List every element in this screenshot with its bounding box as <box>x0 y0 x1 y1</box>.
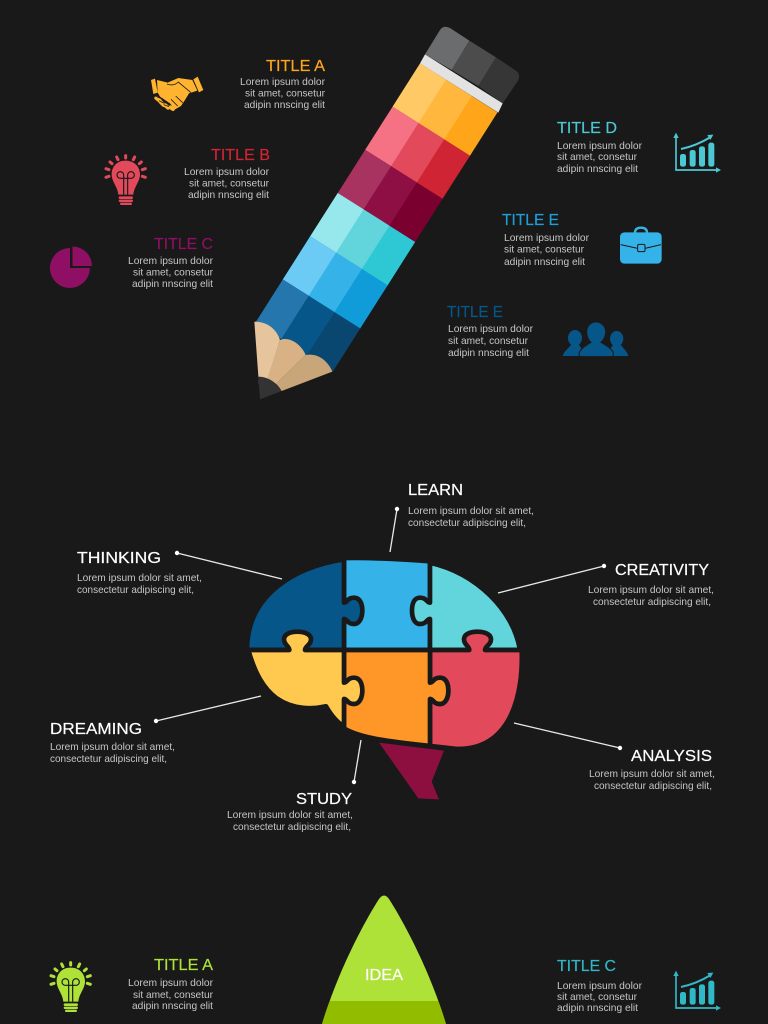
block: title C bottom: TITLE C <box>557 958 616 975</box>
block: title E navy: adipin nnscing elit <box>448 348 529 359</box>
block: title E navy <box>447 304 534 359</box>
block: title E blue: adipin nnscing elit <box>504 257 585 268</box>
block: title D: Lorem ipsum dolor <box>557 141 643 152</box>
label: learn: consectetur adipiscing elit, <box>408 518 526 529</box>
label: learn <box>408 482 534 529</box>
block: title E navy: Lorem ipsum dolor <box>448 324 534 335</box>
block: title D <box>557 120 643 175</box>
puzzle piece: pink <box>430 632 522 749</box>
block: title C: sit amet, consetur <box>133 268 214 278</box>
block: title A top: TITLE A <box>266 58 325 75</box>
puzzle piece: yellow <box>248 632 362 727</box>
block: title A bottom: adipin nnscing elit <box>132 1001 213 1012</box>
block: title E blue: TITLE E <box>502 212 559 229</box>
label: analysis <box>589 748 715 792</box>
label: analysis: consectetur adipiscing elit, <box>594 781 712 792</box>
puzzle piece: orange <box>344 650 448 746</box>
connector: study <box>352 740 361 784</box>
connector: dreaming <box>154 696 261 723</box>
brain puzzle <box>247 558 522 799</box>
label: dreaming: Lorem ipsum dolor sit amet, <box>50 742 175 753</box>
block: title D: sit amet, consetur <box>557 152 638 163</box>
icon: growth chart bottom <box>673 971 721 1011</box>
block: title E navy: TITLE E <box>447 304 503 321</box>
block: title C: Lorem ipsum dolor <box>128 256 214 267</box>
block: title B <box>184 147 270 201</box>
label: creativity: CREATIVITY <box>615 562 709 579</box>
connector: analysis <box>514 723 622 750</box>
icon: light bulb red <box>106 156 145 205</box>
block: title C bottom: adipin nnscing elit <box>557 1003 638 1014</box>
label: study: STUDY <box>296 791 352 808</box>
idea cone <box>322 896 446 1024</box>
label: learn: LEARN <box>408 482 463 499</box>
label: dreaming <box>50 721 175 765</box>
label: thinking: Lorem ipsum dolor sit amet, <box>77 573 202 584</box>
pencil wood tip <box>254 322 332 399</box>
icon: people <box>563 322 628 357</box>
label: learn: Lorem ipsum dolor sit amet, <box>408 506 534 517</box>
block: title D: adipin nnscing elit <box>557 164 638 175</box>
block: title C: adipin nnscing elit <box>132 279 213 290</box>
label: thinking: THINKING <box>77 550 161 567</box>
label: thinking <box>77 550 202 596</box>
block: title A top: adipin nnscing elit <box>244 100 325 111</box>
puzzle piece: cyan <box>412 563 520 650</box>
block: title A top: sit amet, consetur <box>245 88 326 100</box>
puzzle piece: navy <box>247 559 362 650</box>
label: creativity: consectetur adipiscing elit, <box>593 597 711 608</box>
block: title C bottom: sit amet, consetur <box>557 992 638 1003</box>
block: title E blue: Lorem ipsum dolor <box>504 233 590 244</box>
label: thinking: consectetur adipiscing elit, <box>77 585 194 596</box>
block: title C <box>128 236 214 290</box>
pencil eraser <box>420 27 519 113</box>
connector: thinking <box>175 551 282 579</box>
label: study <box>227 791 353 833</box>
block: title E navy: sit amet, consetur <box>448 336 529 347</box>
block: title B: adipin nnscing elit <box>188 190 269 201</box>
icon: briefcase <box>620 228 662 264</box>
block: title A bottom: Lorem ipsum dolor <box>128 978 214 989</box>
block: title E blue: sit amet, consetur <box>504 244 585 256</box>
connector: creativity <box>498 564 606 593</box>
label: analysis: Lorem ipsum dolor sit amet, <box>589 769 715 780</box>
label: creativity <box>588 562 714 608</box>
label: dreaming: consectetur adipiscing elit, <box>50 754 167 765</box>
block: title E blue <box>502 212 590 268</box>
label: study: consectetur adipiscing elit, <box>233 822 351 833</box>
brain stem <box>379 743 444 799</box>
icon: pie chart <box>50 246 92 288</box>
block: title C bottom: Lorem ipsum dolor <box>557 981 643 992</box>
block: title D: TITLE D <box>557 120 617 137</box>
block: title A top: Lorem ipsum dolor <box>240 77 326 88</box>
block: title B: TITLE B <box>211 147 270 164</box>
label: study: Lorem ipsum dolor sit amet, <box>227 810 353 821</box>
label: creativity: Lorem ipsum dolor sit amet, <box>588 585 714 596</box>
block: title C bottom <box>557 958 643 1014</box>
block: title B: Lorem ipsum dolor <box>184 167 270 178</box>
block: title A bottom <box>128 957 214 1012</box>
connector: learn <box>390 507 399 552</box>
icon: growth chart <box>673 133 721 173</box>
block: title A top <box>240 58 326 111</box>
pencil illustration <box>254 27 519 399</box>
block: title A bottom: TITLE A <box>154 957 213 974</box>
label: dreaming: DREAMING <box>50 721 142 738</box>
icon: handshake <box>151 77 203 109</box>
block: title B: sit amet, consetur <box>189 178 270 190</box>
block: title A bottom: sit amet, consetur <box>133 990 214 1001</box>
idea cone: IDEA <box>365 967 403 984</box>
icon: light bulb lime <box>51 963 90 1012</box>
puzzle piece: blue <box>344 558 430 650</box>
pencil colored body bands <box>255 64 498 372</box>
block: title C: TITLE C <box>154 236 213 253</box>
label: analysis: ANALYSIS <box>631 748 712 765</box>
